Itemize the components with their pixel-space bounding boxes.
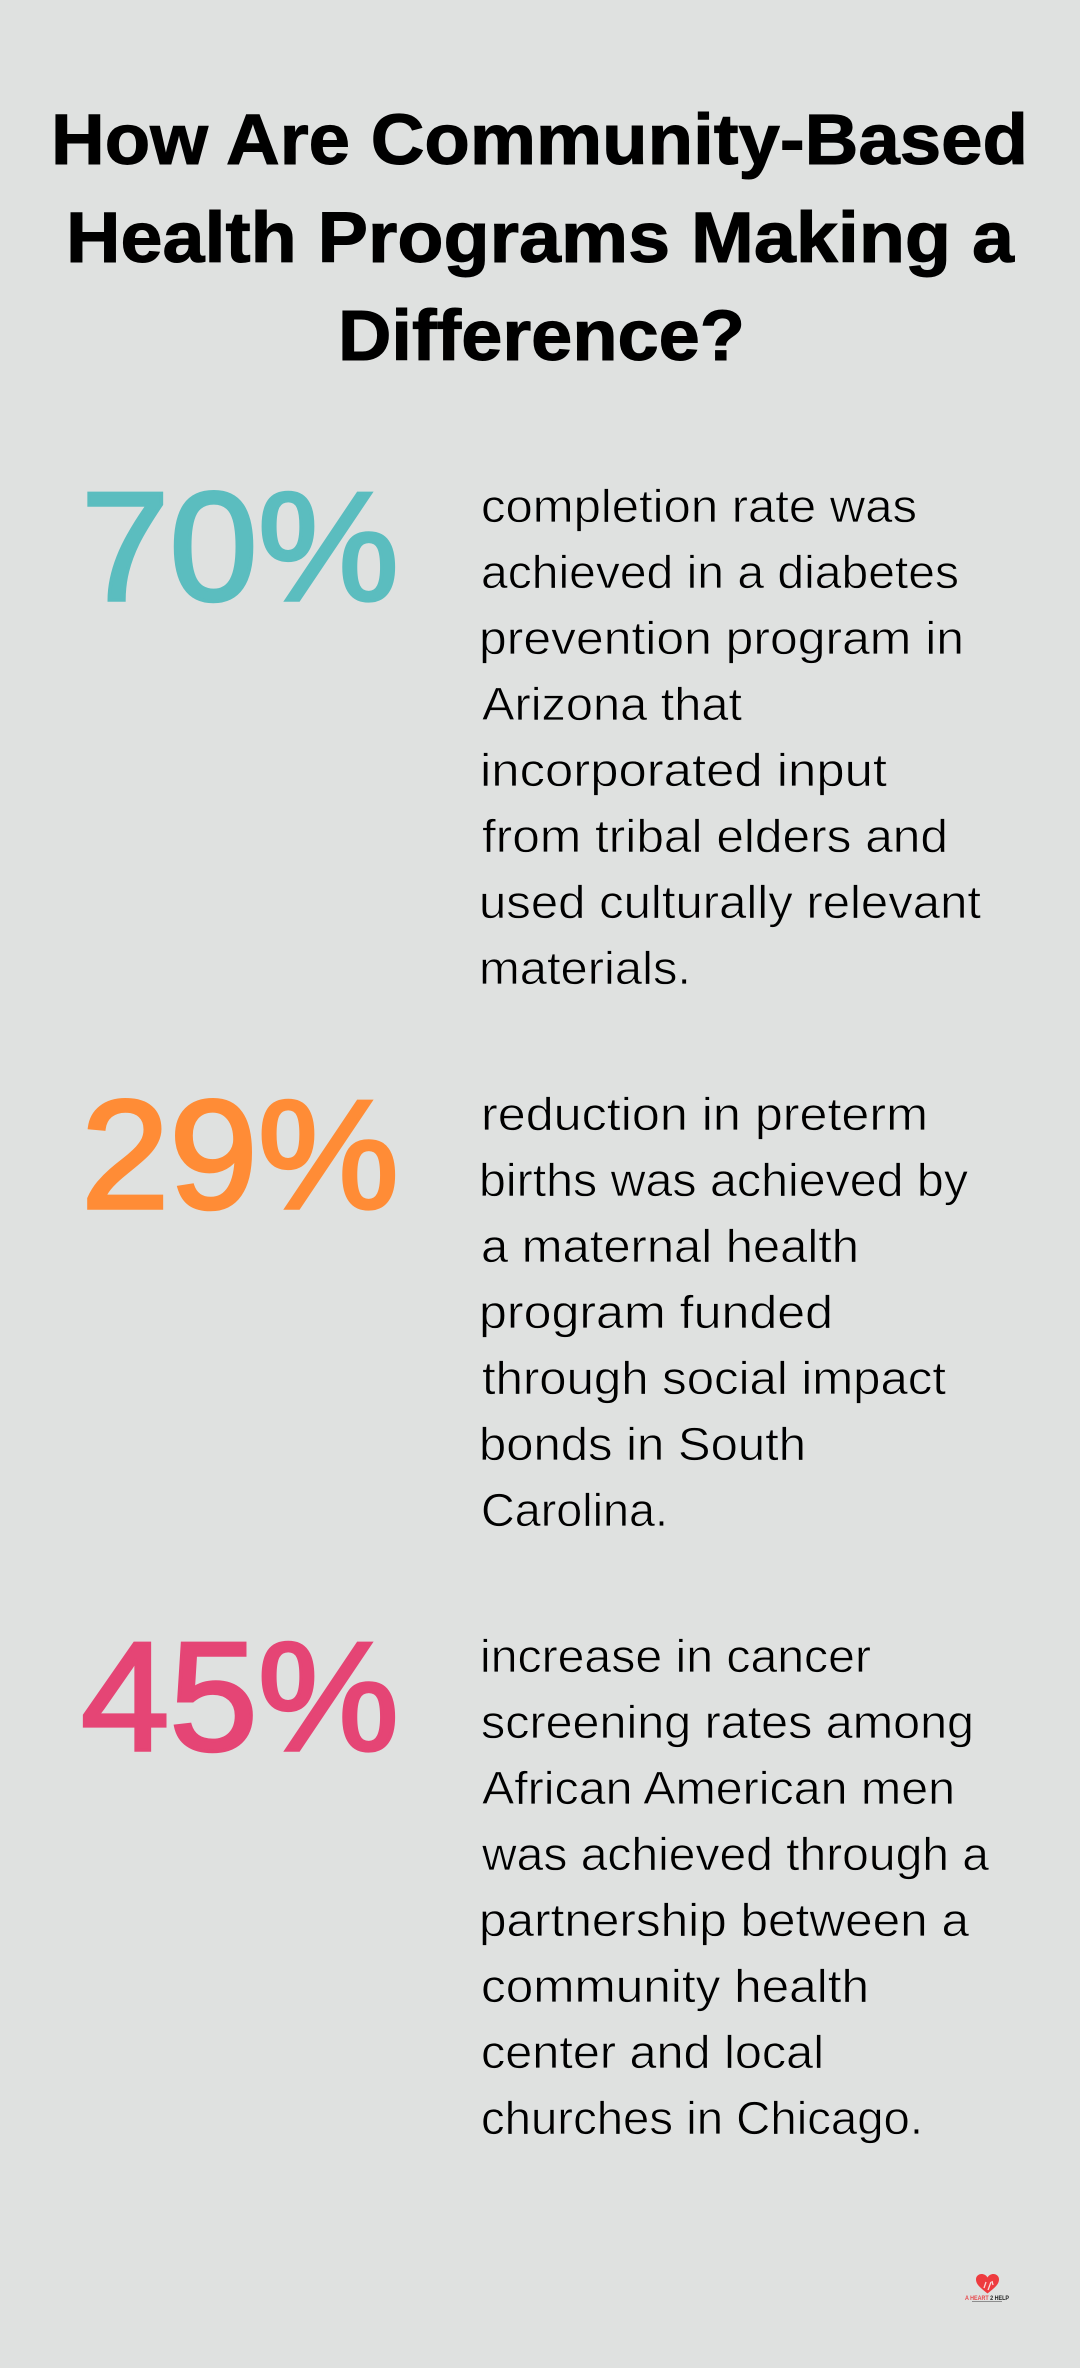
text block: cancer screening partnership bbox=[479, 1630, 989, 2144]
text block: diabetes prevention program bbox=[479, 480, 981, 994]
text block: diabetes prevention program: prevention program in bbox=[479, 612, 964, 664]
text block: maternal health program: births was achieved by bbox=[479, 1154, 968, 1206]
text block: maternal health program: program funded bbox=[479, 1286, 833, 1338]
text block: diabetes prevention program: from tribal elders and bbox=[482, 810, 948, 862]
text block: maternal health program bbox=[479, 1088, 968, 1536]
text block: diabetes prevention program: materials. bbox=[479, 942, 691, 994]
text block: cancer screening partnership: center and local bbox=[481, 2026, 824, 2078]
text block: diabetes prevention program: completion rate was bbox=[481, 480, 917, 532]
text block: cancer screening partnership: was achieved through a bbox=[481, 1828, 989, 1880]
text block: diabetes prevention program: Arizona that bbox=[482, 678, 742, 730]
text block: maternal health program: reduction in preterm bbox=[481, 1088, 928, 1140]
text block: diabetes prevention program: incorporated input bbox=[480, 744, 887, 796]
icon: A Heart 2 Help logo bbox=[965, 2274, 1009, 2302]
text block: cancer screening partnership: African American men bbox=[482, 1762, 955, 1814]
text block: maternal health program: bonds in South bbox=[479, 1418, 806, 1470]
text block: maternal health program: Carolina. bbox=[481, 1484, 668, 1536]
panel: stat 70% bbox=[81, 460, 981, 994]
text block: cancer screening partnership: screening rates among bbox=[481, 1696, 974, 1748]
stat number: 70%: 70% bbox=[81, 460, 399, 633]
text block: maternal health program: a maternal health bbox=[481, 1220, 859, 1272]
title: How Are Community-Based bbox=[51, 101, 1028, 180]
text block: cancer screening partnership: partnership between a bbox=[479, 1894, 969, 1946]
title bbox=[51, 101, 1028, 376]
title: Difference? bbox=[338, 297, 745, 376]
text block: diabetes prevention program: achieved in a diabetes bbox=[481, 546, 959, 598]
text block: cancer screening partnership: increase in cancer bbox=[480, 1630, 871, 1682]
title: Health Programs Making a bbox=[66, 199, 1015, 278]
stat number: 45%: 45% bbox=[81, 1610, 399, 1783]
icon: A Heart 2 Help logo: A HEART 2 HELP bbox=[965, 2296, 1009, 2302]
text block: diabetes prevention program: used culturally relevant bbox=[479, 876, 981, 928]
panel: stat 29% bbox=[81, 1068, 968, 1536]
text block: cancer screening partnership: community health bbox=[481, 1960, 869, 2012]
stat number: 29%: 29% bbox=[81, 1068, 399, 1241]
text block: maternal health program: through social impact bbox=[482, 1352, 946, 1404]
text block: cancer screening partnership: churches in Chicago. bbox=[481, 2092, 923, 2144]
panel: stat 45% bbox=[81, 1610, 989, 2144]
